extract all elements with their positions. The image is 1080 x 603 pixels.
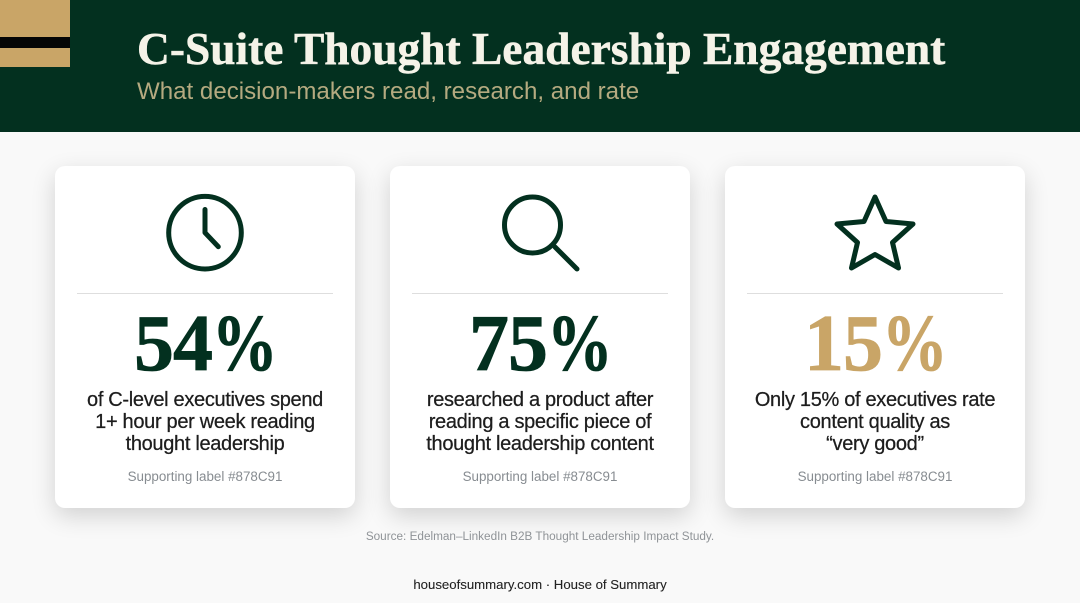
description: “very good” [826, 433, 924, 455]
description: 1+ hour per week reading [95, 411, 315, 433]
description [755, 388, 995, 455]
statistic 15%: 15 [804, 300, 882, 388]
icon: star [834, 194, 916, 270]
title: C-Suite Thought Leadership Engagement [137, 23, 945, 74]
description: researched a product after [427, 388, 653, 410]
description [426, 388, 654, 455]
panel: content quality [725, 166, 1025, 508]
source note: Source: Edelman–LinkedIn B2B Thought Leadership Impact Study. [366, 530, 714, 542]
supporting label: Supporting label #878C91 [798, 468, 952, 484]
statistic 75%: 75 [469, 300, 547, 388]
description: content quality as [800, 411, 950, 433]
supporting label: Supporting label #878C91 [463, 468, 617, 484]
statistic 54%: 54 [134, 300, 212, 388]
footer: houseofsummary.com · House of Summary [413, 576, 667, 592]
supporting label: Supporting label #878C91 [128, 468, 282, 484]
description: Only 15% of executives rate [755, 388, 995, 410]
description: thought leadership content [426, 433, 654, 455]
panel: executives reading [55, 166, 355, 508]
description: of C-level executives spend [87, 388, 323, 410]
panel: product research [390, 166, 690, 508]
description [87, 388, 323, 455]
statistic 54% [134, 300, 278, 388]
statistic 54%: % [212, 300, 278, 388]
statistic 15% [804, 300, 948, 388]
statistic 75%: % [547, 300, 613, 388]
header band [0, 0, 1080, 132]
description: reading a specific piece of [429, 411, 651, 433]
icon: magnifying glass [502, 194, 580, 272]
subtitle: What decision-makers read, research, and rate [137, 78, 639, 104]
statistic 75% [469, 300, 613, 388]
description: thought leadership [126, 433, 284, 455]
logo mark [0, 0, 70, 67]
statistic 15%: % [882, 300, 948, 388]
icon: clock [166, 194, 244, 272]
